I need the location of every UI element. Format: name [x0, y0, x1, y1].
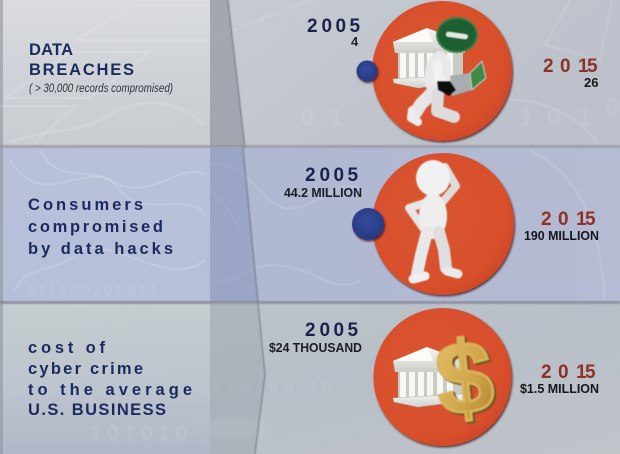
icon: gold dollar sign: $: [430, 318, 499, 438]
panel: row 3 background: [0, 304, 620, 454]
heading: consumers compromised: compromised: [28, 218, 163, 236]
stat: 2005 data breaches: [307, 16, 360, 49]
panel: row 1 background: 0: [606, 94, 619, 121]
disc: data breaches: [356, 1, 512, 141]
heading: consumers compromised: [28, 196, 173, 258]
panel: row 1 background: 0: [547, 104, 560, 131]
stat: 2015 data breaches: 26: [584, 75, 598, 90]
row dividers: [0, 145, 620, 304]
panel: row 1 background: [0, 0, 620, 147]
stat: 2015 cost: $1.5 MILLION: [520, 381, 599, 396]
panel: left label column: 111100100011: [28, 282, 160, 299]
heading: data breaches: DATA: [29, 41, 73, 59]
panel: row 1 background: 1: [520, 104, 533, 131]
stat: 2005 data breaches: 4: [351, 34, 359, 49]
icon: hacker figure: [411, 18, 486, 122]
stat: 2015 cost: 2015: [541, 362, 596, 383]
stat: 2005 consumers: [284, 165, 362, 200]
dot: 2005 consumers: [352, 208, 384, 240]
icon: confused figure: [409, 160, 458, 279]
disc: consumers compromised: [352, 153, 514, 295]
stat: 2005 consumers: 2005: [305, 165, 358, 186]
panel: left label column: 101010: [90, 423, 193, 445]
panel: dark vertical band: [210, 0, 265, 454]
heading: cost of cyber crime: cost of: [28, 339, 106, 357]
heading: data breaches: [29, 41, 134, 79]
heading: cost of cyber crime: to the average: [28, 381, 192, 399]
icon: bank: [393, 28, 465, 88]
stat: 2005 data breaches: 2005: [307, 16, 360, 37]
stat: 2015 data breaches: [543, 56, 598, 90]
panel: row 1 background: 1: [578, 104, 591, 131]
stat: 2015 cost: [520, 362, 599, 396]
stat: 2015 consumers: 2015: [541, 209, 596, 230]
dot: 2005 data breaches: [356, 60, 378, 82]
panel: row 1 background: 0: [300, 104, 313, 131]
stat: 2015 consumers: 190 MILLION: [524, 228, 599, 243]
stat: 2005 cost: $24 THOUSAND: [269, 340, 362, 355]
heading: cost of cyber crime: cyber crime: [28, 360, 143, 378]
heading: consumers compromised: by data hacks: [28, 240, 173, 258]
stat: 2005 cost: [269, 320, 362, 355]
panel: row 1 background: 0: [260, 9, 273, 36]
panel: row 3 background: 1010100 10: [198, 379, 337, 396]
disc: cost of cyber crime: [374, 308, 512, 446]
heading: cost of cyber crime: [28, 339, 192, 419]
panel: left label column: [0, 0, 210, 454]
stat: 2015 data breaches: 2015: [543, 56, 598, 77]
icon: gold dollar sign: $: [432, 320, 501, 439]
stat: 2005 cost: 2005: [305, 320, 358, 341]
note: records compromised: ( > 30,000 records compromised): [29, 83, 173, 95]
stat: 2015 consumers: [524, 209, 599, 243]
stat: 2005 consumers: 44.2 MILLION: [284, 185, 362, 200]
heading: cost of cyber crime: U.S. BUSINESS: [28, 401, 166, 419]
icon: bank: [393, 347, 465, 407]
heading: consumers compromised: Consumers: [28, 196, 143, 214]
panel: row 2 background: [0, 148, 620, 302]
panel: row 1 background: 1: [330, 104, 343, 131]
heading: data breaches: BREACHES: [29, 61, 134, 79]
